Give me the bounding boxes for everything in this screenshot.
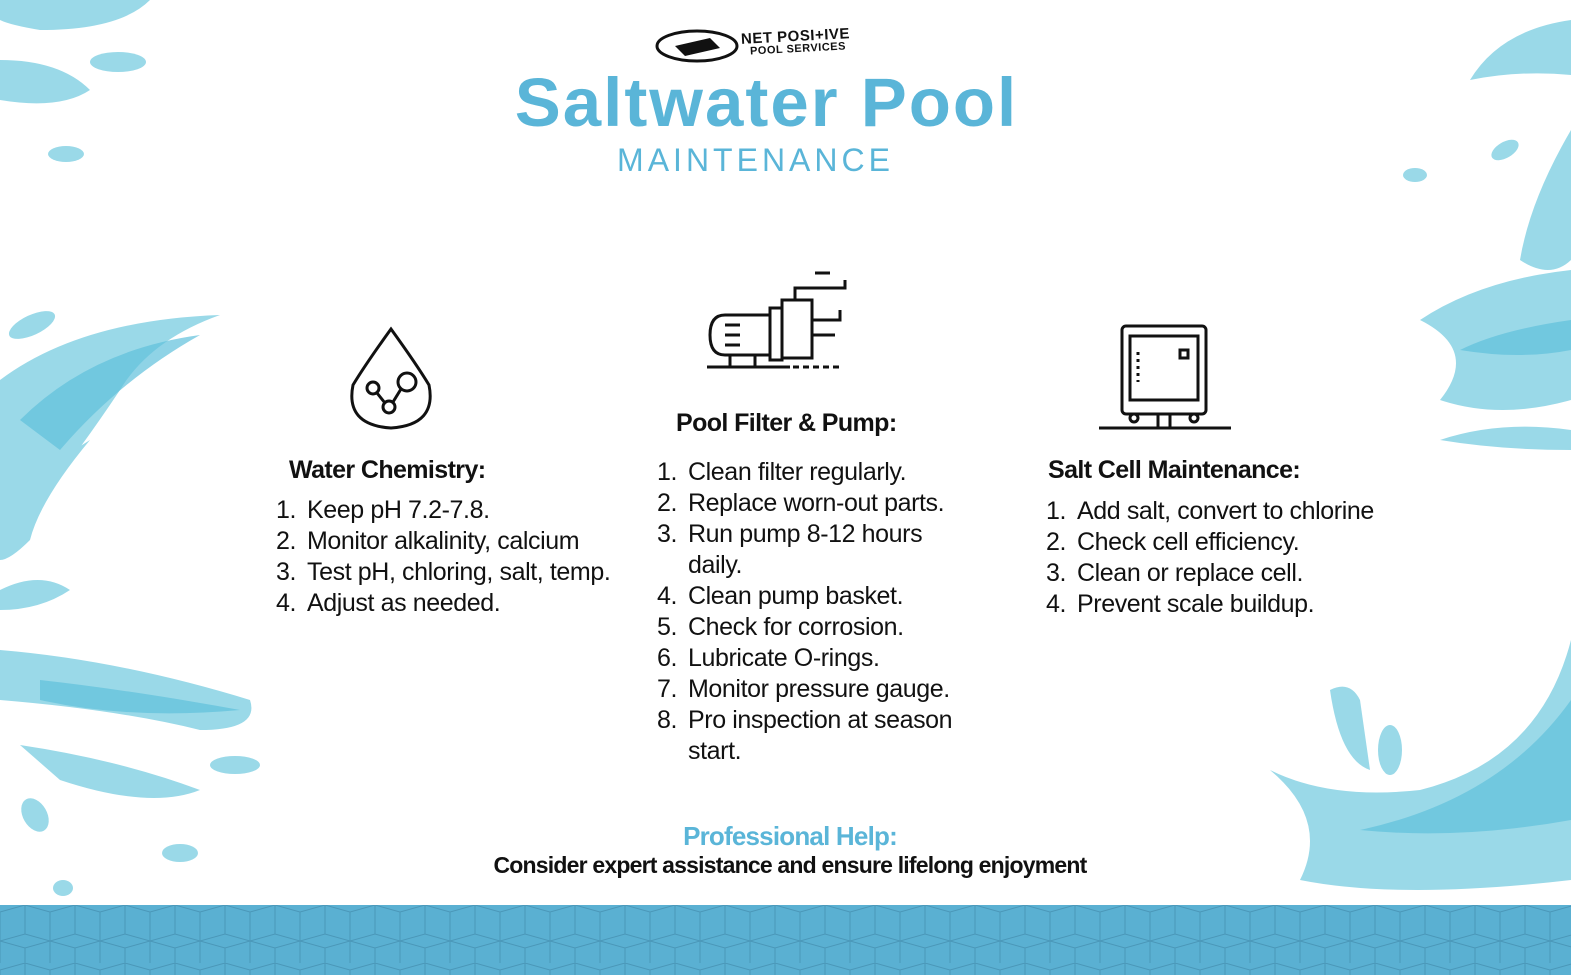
icon: water drop (350, 326, 432, 430)
panel: salt cell maintenance: Prevent scale buildup. (1077, 590, 1314, 618)
callout: professional help: Consider expert assistance and ensure lifelong enjoyment (493, 852, 1086, 878)
subtitle: MAINTENANCE (617, 142, 894, 178)
panel: pool filter & pump: 8. (657, 706, 677, 734)
panel: salt cell maintenance: Clean or replace cell. (1077, 559, 1303, 587)
logo (656, 25, 850, 62)
panel: pool filter & pump: daily. (688, 551, 742, 579)
title: Saltwater Pool (515, 64, 1018, 141)
panel: pool filter & pump: Pool Filter & Pump: (676, 409, 897, 437)
icon: pump (707, 272, 846, 368)
panel: water chemistry: 2. (276, 527, 296, 555)
panel: salt cell maintenance: Add salt, convert to chlorine (1077, 497, 1374, 525)
panel: pool filter & pump: Replace worn-out parts. (688, 489, 944, 517)
icon: salt cell (1099, 324, 1231, 430)
panel: pool filter & pump: Run pump 8-12 hours (688, 520, 922, 548)
panel: pool filter & pump: 1. (657, 458, 677, 486)
panel: salt cell maintenance: Salt Cell Maintenance: (1048, 456, 1300, 484)
callout: professional help: Professional Help: (683, 821, 897, 851)
panel: pool filter & pump (657, 409, 952, 765)
panel: pool filter & pump: Lubricate O-rings. (688, 644, 880, 672)
panel: pool filter & pump: 5. (657, 613, 677, 641)
panel: pool filter & pump: start. (688, 737, 741, 765)
panel: pool filter & pump: Check for corrosion. (688, 613, 904, 641)
panel: salt cell maintenance: 4. (1046, 590, 1066, 618)
panel: water chemistry (276, 456, 610, 617)
panel: pool filter & pump: Pro inspection at season (688, 706, 952, 734)
panel: pool filter & pump: 2. (657, 489, 677, 517)
panel: water chemistry: 1. (276, 496, 296, 524)
panel: salt cell maintenance: 2. (1046, 528, 1066, 556)
panel: pool filter & pump: Clean pump basket. (688, 582, 903, 610)
footer band (0, 905, 1571, 975)
panel: salt cell maintenance: 3. (1046, 559, 1066, 587)
panel: water chemistry: Adjust as needed. (307, 589, 500, 617)
panel: water chemistry: Water Chemistry: (289, 456, 485, 484)
panel: water chemistry: Keep pH 7.2-7.8. (307, 496, 490, 524)
panel: water chemistry: Monitor alkalinity, calcium (307, 527, 579, 555)
panel: salt cell maintenance (1046, 456, 1374, 618)
panel: water chemistry: 3. (276, 558, 296, 586)
panel: pool filter & pump: 7. (657, 675, 677, 703)
panel: pool filter & pump: 4. (657, 582, 677, 610)
logo: POOL SERVICES (750, 40, 846, 58)
callout: professional help (493, 821, 1087, 878)
logo: NET POSI+IVE (741, 25, 850, 48)
panel: pool filter & pump: Clean filter regularly. (688, 458, 906, 486)
panel: salt cell maintenance: 1. (1046, 497, 1066, 525)
panel: pool filter & pump: 3. (657, 520, 677, 548)
panel: water chemistry: 4. (276, 589, 296, 617)
panel: water chemistry: Test pH, chloring, salt, temp. (307, 558, 610, 586)
panel: pool filter & pump: 6. (657, 644, 677, 672)
panel: salt cell maintenance: Check cell efficiency. (1077, 528, 1299, 556)
panel: pool filter & pump: Monitor pressure gauge. (688, 675, 950, 703)
